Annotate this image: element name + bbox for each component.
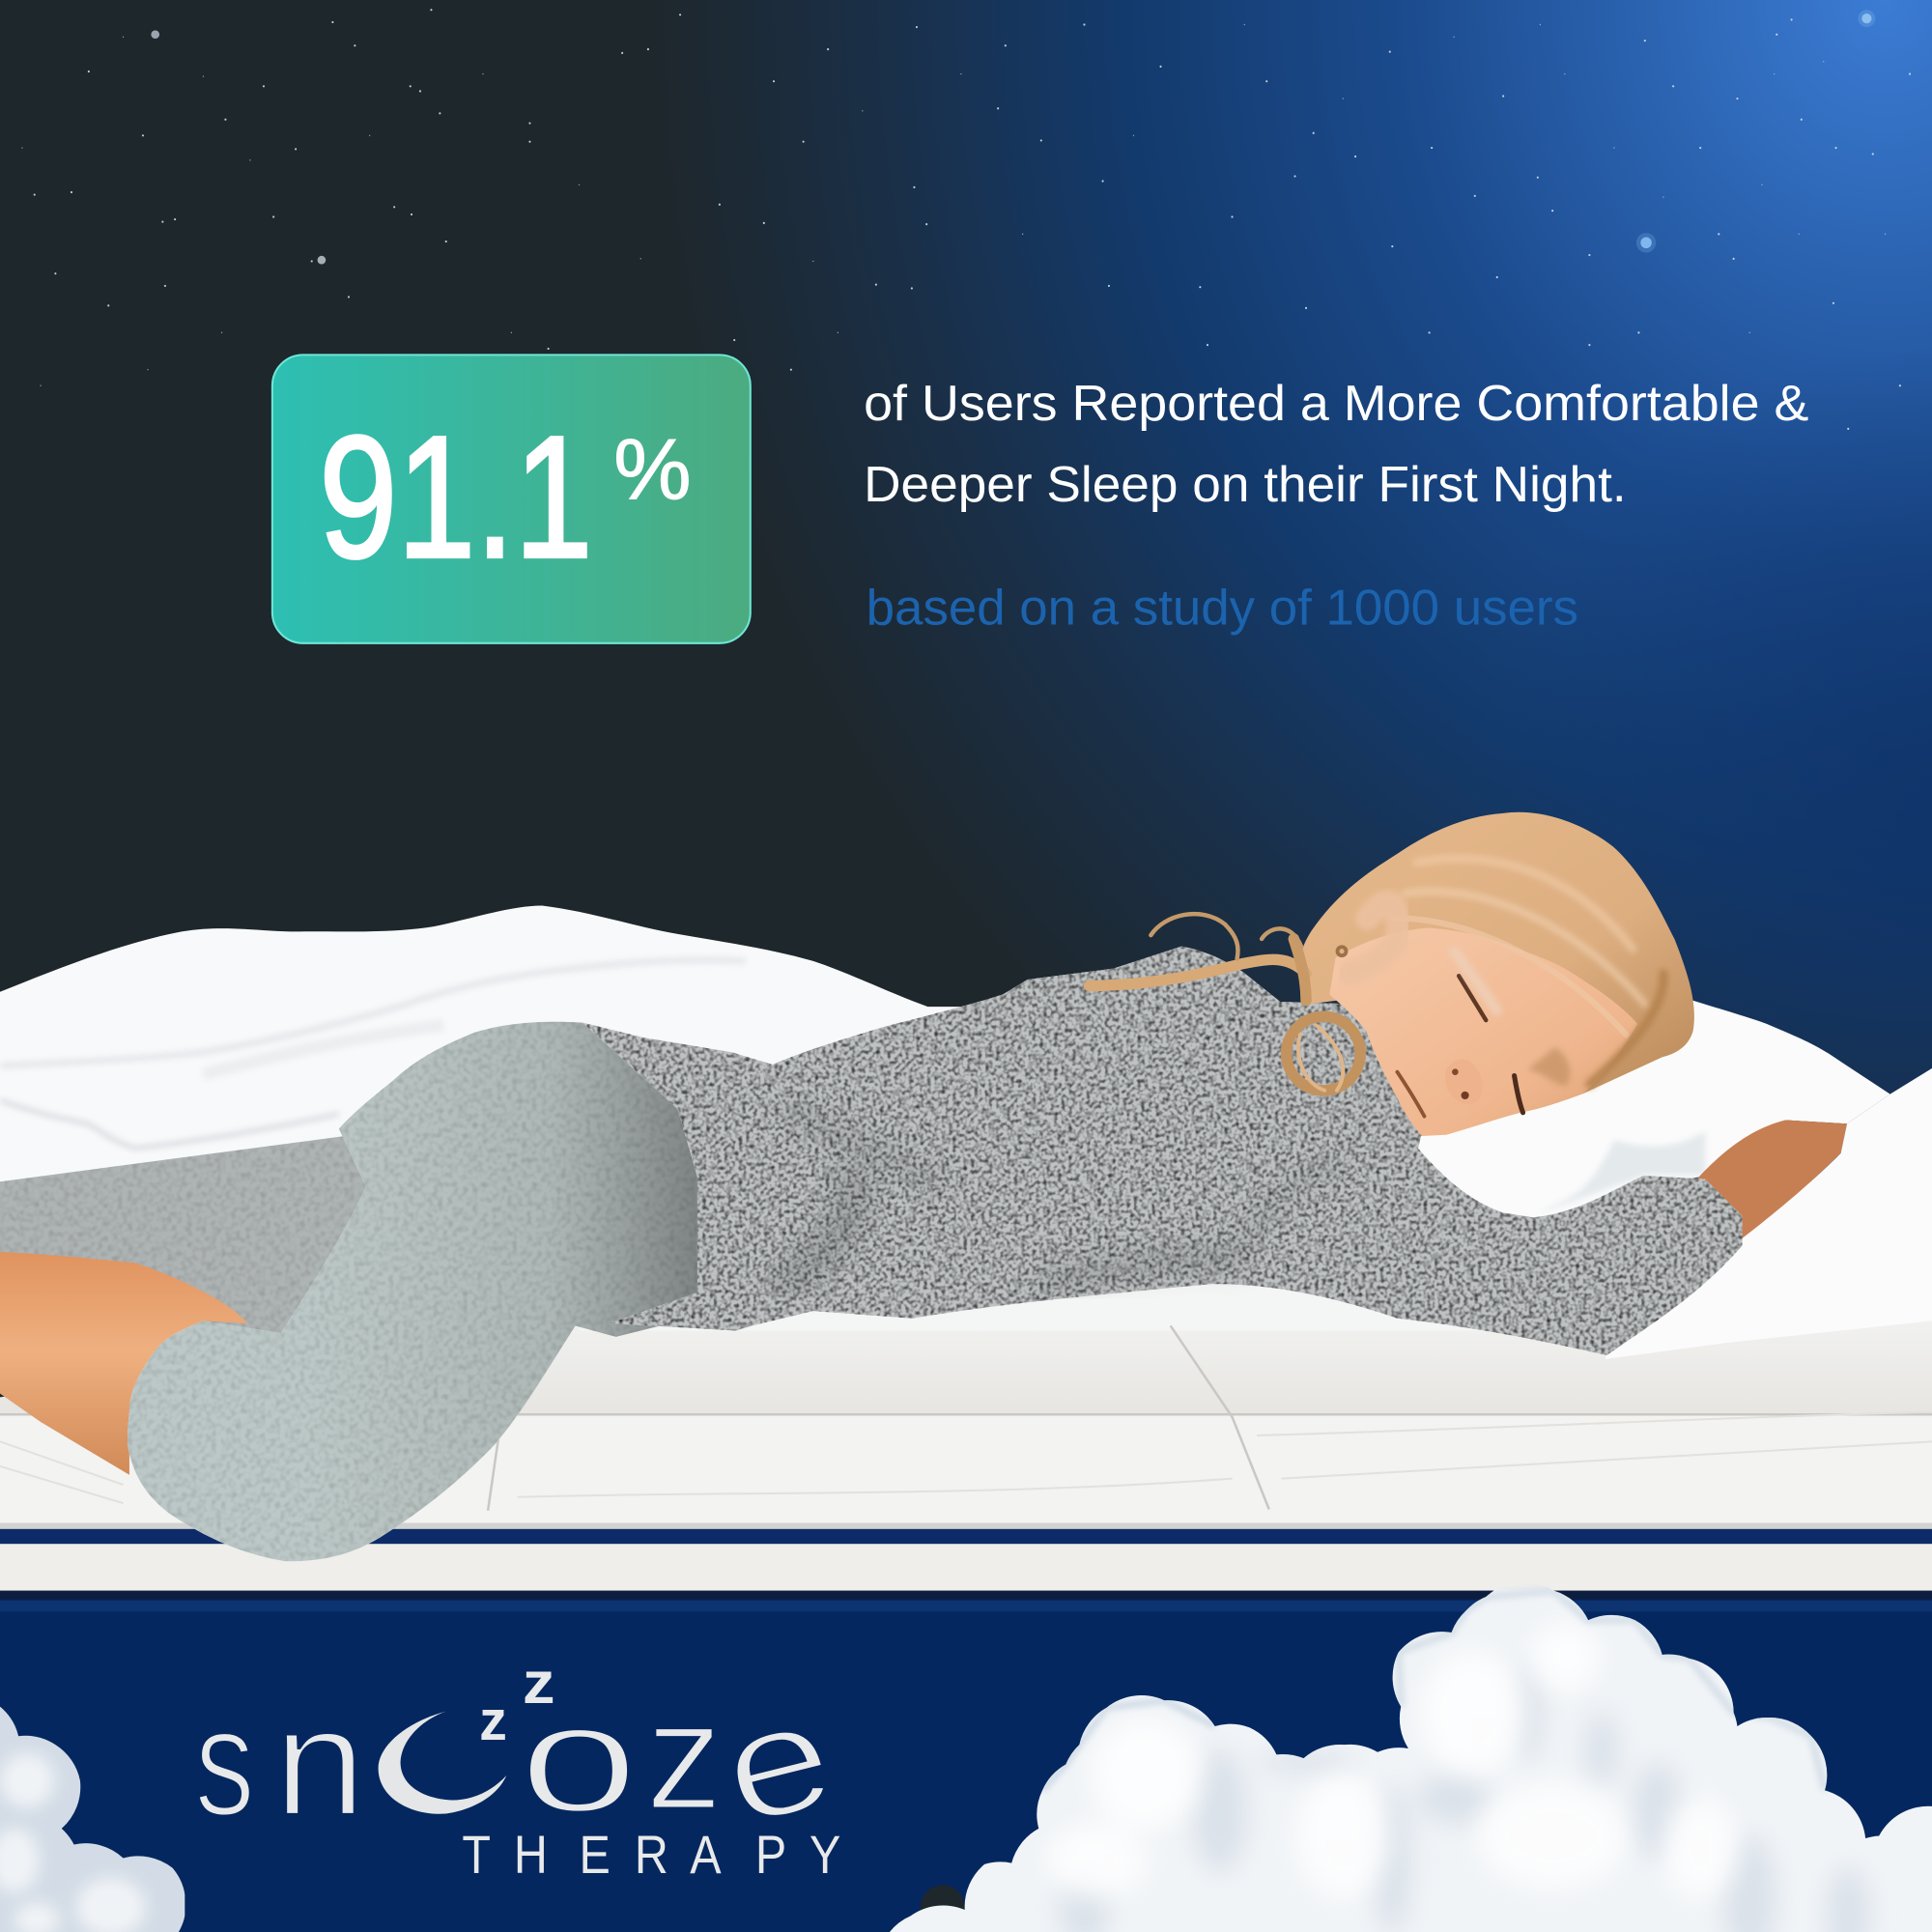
brand logo: snooze therapy: z [645,1669,723,1841]
pillow [1392,1001,1890,1233]
headline text: Deeper Sleep on their First Night. [864,457,1627,513]
cloud: bottom left [0,1700,185,1932]
headline text [864,376,1809,513]
far leg in leggings [0,1136,407,1350]
stat badge: 91.1%: 91.1 [319,401,593,595]
brand logo: snooze therapy: n [273,1677,366,1848]
brand logo: snooze therapy: THERAPY [462,1826,840,1886]
blanket over right side [1605,1068,1932,1359]
dark notch by cloud [921,1886,965,1929]
blanket behind legs [0,906,996,1233]
mattress navy base [0,1600,1932,1932]
stat badge: 91.1%: % [613,421,692,518]
study note: based on a study of 1000 users [867,581,1578,637]
arm [1688,1120,1847,1247]
mattress top layer [0,1282,1932,1601]
sweater folds [788,1109,1343,1282]
front leg in leggings [128,1022,739,1561]
cloud: bottom right [887,1589,1932,1932]
brand logo: snooze therapy [195,1650,849,1886]
night sky background [0,0,1932,1355]
bare leg [0,1252,247,1475]
headline text: of Users Reported a More Comfortable & [864,376,1809,432]
sweater [582,947,1743,1355]
starfield [22,10,1910,429]
hair back [1299,812,1694,1094]
brand logo: snooze therapy: e [705,1665,849,1858]
brand logo: snooze therapy: z [479,1689,507,1752]
stat badge: 91.1% [272,355,751,643]
brand logo: snooze therapy: o [519,1672,639,1845]
hair strands and curls [1090,859,1663,1091]
brand logo: snooze therapy: z [523,1650,554,1716]
face [1329,927,1637,1136]
brand logo: snooze therapy: s [195,1677,255,1848]
